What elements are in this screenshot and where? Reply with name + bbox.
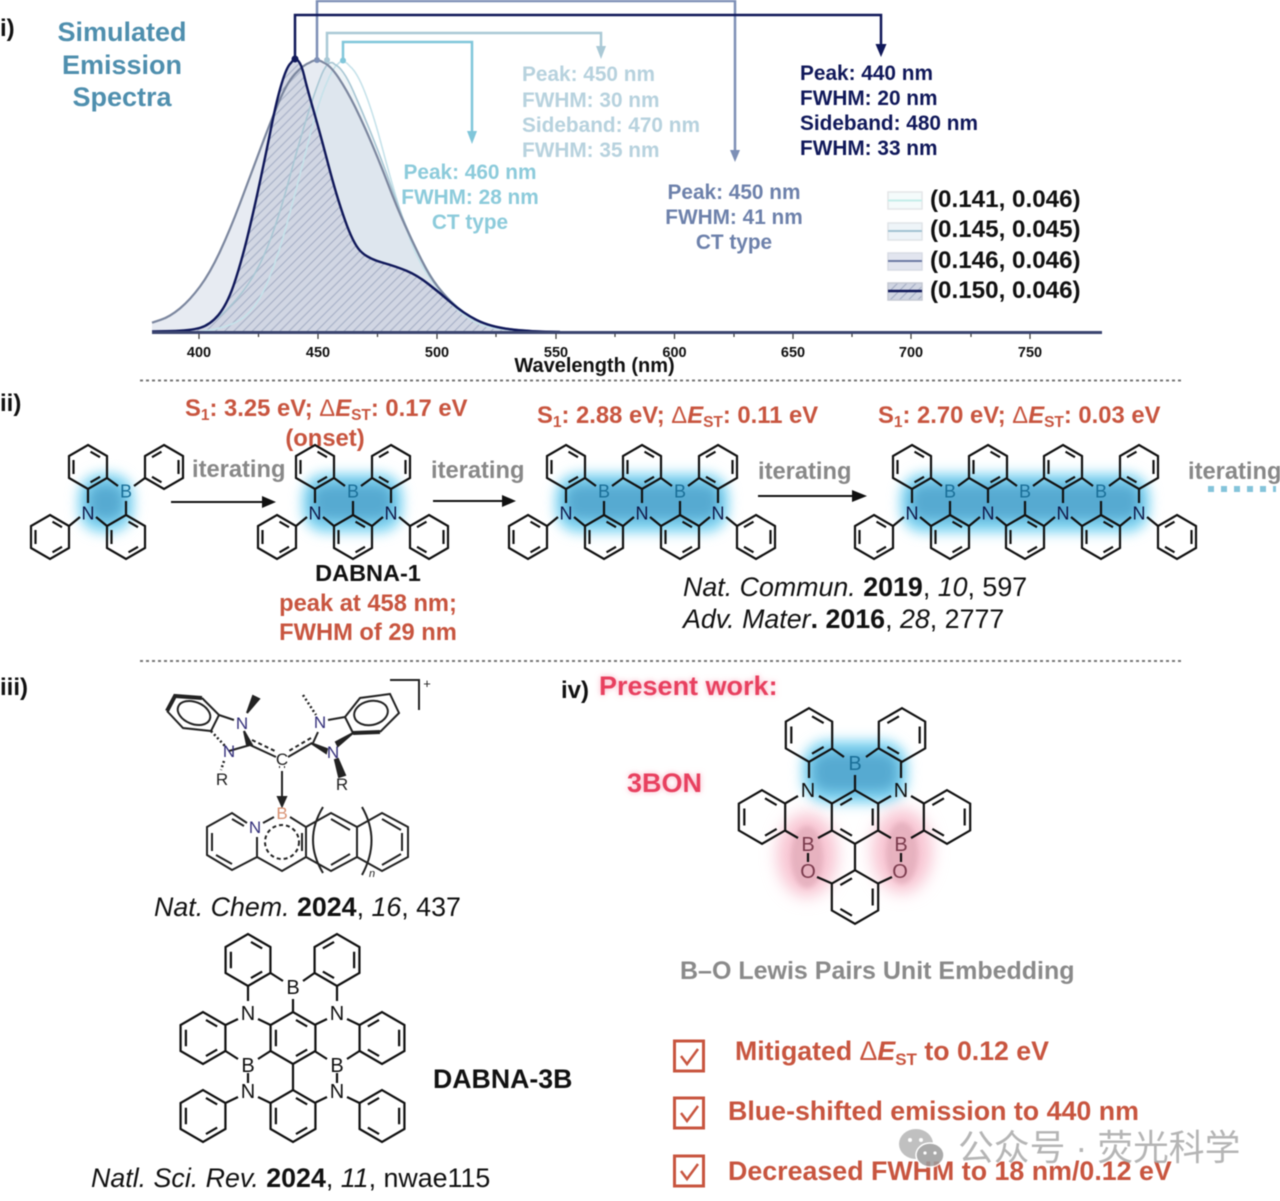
heading: S1 2.88 eV: ST xyxy=(703,414,723,431)
molecule: carbone-stabilised boron: C xyxy=(276,750,288,769)
molecule: three-boron oligomer xyxy=(855,445,1196,559)
molecule: monomer unit xyxy=(31,445,183,559)
heading: S1 2.70 eV: : 2.70 eV; xyxy=(902,402,1012,429)
molecule: three-boron oligomer: N xyxy=(982,504,994,524)
molecule: DABNA-3B xyxy=(181,934,404,1142)
heading: S1 3.25 eV: : 3.25 eV; xyxy=(210,395,319,422)
molecule: carbone-stabilised boron xyxy=(167,676,431,880)
molecule: three-boron oligomer: N xyxy=(906,504,918,524)
glow: right B–O pair xyxy=(872,809,932,893)
check item: FWHM: Decreased FWHM to 18 nm/0.12 eV xyxy=(728,1156,1172,1186)
x axis: 500 xyxy=(425,345,449,361)
axis title: Wavelength (nm) xyxy=(514,355,675,377)
molecule: three-boron oligomer: B xyxy=(1019,482,1031,502)
panel label: i: i) xyxy=(0,15,15,42)
molecule: 3BON: O xyxy=(892,861,908,883)
legend: (0.150, 0.046) xyxy=(930,277,1081,304)
arrow: 460 nm bracket xyxy=(340,42,477,144)
molecule: carbone-stabilised boron: + xyxy=(423,676,431,691)
label: iterating continuation: iterating xyxy=(1188,459,1280,485)
heading: S1 2.70 eV: : 0.03 eV xyxy=(1064,402,1161,429)
heading: Present work: Present work: xyxy=(599,671,778,701)
glow: blue B–N core xyxy=(802,740,908,804)
x axis: 700 xyxy=(899,345,923,361)
references: panel ii: Nat. Commun. 2019, 10, 597 xyxy=(683,572,1027,602)
molecule: carbone-stabilised boron: N xyxy=(249,818,261,837)
x axis: 550 xyxy=(544,345,568,361)
checklist xyxy=(674,1036,1172,1186)
heading: S1 3.25 eV: ΔE xyxy=(319,395,351,422)
arrow: iterating 3 xyxy=(758,459,867,502)
x axis: 450 xyxy=(306,345,330,361)
check item: mitigated: Mitigated ΔE xyxy=(735,1036,895,1066)
heading: S1 3.25 eV: S xyxy=(185,395,201,422)
molecule: 3BON: O xyxy=(800,861,816,883)
legend: (0.141, 0.046) xyxy=(930,186,1081,213)
molecule: two-boron oligomer: N xyxy=(636,504,648,524)
molecule: two-boron oligomer: B xyxy=(598,482,610,502)
title: Simulated Emission Spectra: Simulated xyxy=(57,17,187,47)
heading: S1 2.70 eV: 1 xyxy=(894,414,903,431)
heading: S1 2.88 eV: S xyxy=(537,402,553,429)
annotation: 450 nm sideband: FWHM: 35 nm xyxy=(522,139,660,162)
left benzo ring xyxy=(167,696,219,731)
check item: mitigated: to 0.12 eV xyxy=(917,1036,1049,1066)
molecule: 3BON xyxy=(739,708,970,924)
molecule: DABNA-1 xyxy=(258,445,448,559)
area fill: wide spectrum xyxy=(152,60,560,332)
check item: mitigated xyxy=(674,1036,1049,1071)
watermark: 公众号 · 荧光科学 xyxy=(958,1128,1240,1168)
molecule: carbone-stabilised boron: R xyxy=(336,775,348,794)
curve: 450 nm sideband xyxy=(170,63,560,332)
arrow: iterating 2: iterating xyxy=(431,458,524,484)
molecule: 3BON: B xyxy=(801,834,815,856)
references: panel ii xyxy=(681,572,1027,634)
annotation: 440 nm: FWHM: 33 nm xyxy=(800,137,938,160)
molecule: carbone-stabilised boron: n xyxy=(369,868,375,880)
molecule: carbone-stabilised boron: N xyxy=(223,742,235,761)
heading: S1 2.88 eV: 1 xyxy=(553,414,562,431)
title: Simulated Emission Spectra: Spectra xyxy=(72,82,173,112)
heading: S1 2.70 eV: S xyxy=(878,402,894,429)
annotation: 450 nm sideband: Sideband: 470 nm xyxy=(522,114,700,137)
molecule: two-boron oligomer: N xyxy=(712,504,724,524)
text: DABNA-1 emission: FWHM of 29 nm xyxy=(279,620,457,646)
molecule: carbone-stabilised boron: B xyxy=(276,804,288,823)
molecule: two-boron oligomer xyxy=(509,445,775,559)
heading: S1 3.25 eV: 1 xyxy=(201,407,210,424)
reference: Nat. Chem.: Nat. Chem. 2024, 16, 437 xyxy=(154,892,461,922)
x axis: 650 xyxy=(781,345,805,361)
arrow: 450 nm CT bracket xyxy=(314,1,740,162)
molecule: DABNA-3B: B xyxy=(286,977,300,999)
arrow: 440 nm bracket xyxy=(292,15,886,62)
molecule: monomer unit: N xyxy=(82,504,94,524)
molecule: DABNA-3B: N xyxy=(241,1081,255,1103)
annotation: 460 nm CT: Peak: 460 nm xyxy=(404,161,536,184)
arrow: 450 nm sideband bracket xyxy=(324,33,606,63)
molecule: DABNA-3B: B xyxy=(241,1055,255,1077)
legend: (0.146, 0.046) xyxy=(930,247,1081,274)
caption: B–O Lewis pairs: B–O Lewis Pairs Unit Embedding xyxy=(680,957,1075,985)
x axis: 600 xyxy=(662,345,687,361)
molecule: carbone-stabilised boron: N xyxy=(327,743,339,762)
check item: mitigated: ST xyxy=(895,1050,918,1069)
molecule: carbone-stabilised boron: N xyxy=(236,714,248,733)
text: DABNA-1 emission xyxy=(279,591,457,646)
annotation: 450 nm CT: FWHM: 41 nm xyxy=(665,206,803,229)
molecule: carbone-stabilised boron: N xyxy=(314,713,326,732)
molecule: DABNA-3B: N xyxy=(330,1003,344,1025)
annotation: 450 nm CT: Peak: 450 nm xyxy=(668,181,800,204)
molecule: monomer unit: B xyxy=(120,482,132,502)
annotation: 450 nm sideband: FWHM: 30 nm xyxy=(522,89,660,112)
molecule: DABNA-3B: N xyxy=(330,1081,344,1103)
annotation: 440 nm: Sideband: 480 nm xyxy=(800,112,978,135)
molecule: DABNA-1: N xyxy=(308,504,322,524)
molecule: DABNA-1: N xyxy=(384,504,398,524)
annotation: 450 nm sideband: Peak: 450 nm xyxy=(522,63,655,86)
arrow: iterating 1: iterating xyxy=(192,457,285,483)
right benzo ring xyxy=(345,694,399,733)
heading: S1 2.88 eV: : 2.88 eV; xyxy=(562,402,671,429)
legend: (0.145, 0.045) xyxy=(930,216,1081,243)
text: DABNA-1 emission: peak at 458 nm; xyxy=(279,591,457,617)
annotation: 460 nm CT: CT type xyxy=(432,211,508,234)
heading: S1 3.25 eV: ST xyxy=(351,407,371,424)
arrow: iterating 2 xyxy=(431,458,524,507)
molecule: three-boron oligomer: B xyxy=(1095,482,1107,502)
annotation: 450 nm sideband xyxy=(522,63,700,162)
title: Simulated Emission Spectra xyxy=(57,17,187,112)
title: Simulated Emission Spectra: Emission xyxy=(62,50,182,80)
heading: S1 2.70 eV: ΔE xyxy=(1012,402,1044,429)
legend xyxy=(888,186,1081,304)
heading: S1 3.25 eV: : 0.17 eV xyxy=(371,395,468,422)
heading: S1 2.70 eV: ST xyxy=(1044,414,1064,431)
annotation: 440 nm xyxy=(800,62,978,160)
label: DABNA-1: DABNA-1 xyxy=(315,560,421,586)
chart: simulated emission spectra xyxy=(152,59,1102,377)
molecule: DABNA-3B: N xyxy=(241,1003,255,1025)
heading: S1 2.88 eV: : 0.11 eV xyxy=(723,402,818,429)
panel label: iv: iv) xyxy=(561,677,589,704)
annotation: 460 nm CT xyxy=(401,161,539,234)
area fill: sideband spectrum xyxy=(170,63,560,332)
arrow: iterating 3: iterating xyxy=(758,459,851,485)
molecule: DABNA-3B: B xyxy=(330,1055,344,1077)
molecule: 3BON: N xyxy=(801,780,815,802)
molecule: DABNA-1: B xyxy=(347,482,359,502)
molecule: 3BON: B xyxy=(894,834,908,856)
x axis xyxy=(152,332,1102,361)
curve: 450 nm CT type xyxy=(152,60,560,332)
annotation: 460 nm CT: FWHM: 28 nm xyxy=(401,186,539,209)
annotation: 440 nm: Peak: 440 nm xyxy=(800,62,933,85)
annotation: 450 nm CT: CT type xyxy=(696,231,772,254)
curve: 440 nm navy xyxy=(152,59,560,332)
panel label: iii: iii) xyxy=(0,674,28,701)
x axis: 400 xyxy=(187,345,211,361)
annotation: 450 nm CT xyxy=(665,181,803,254)
molecule: two-boron oligomer: B xyxy=(674,482,686,502)
x axis: 750 xyxy=(1018,345,1042,361)
heading: onset: (onset) xyxy=(285,425,365,452)
area fill: hatched navy spectrum xyxy=(152,59,560,332)
molecule: two-boron oligomer: N xyxy=(560,504,572,524)
reference: Natl. Sci. Rev.: Natl. Sci. Rev. 2024, 11, nwae115 xyxy=(91,1163,490,1193)
icon: chat bubbles xyxy=(899,1129,944,1167)
molecule: 3BON: B xyxy=(848,753,862,775)
molecule: three-boron oligomer: B xyxy=(944,482,956,502)
molecule: carbone-stabilised boron: R xyxy=(216,770,228,789)
glow: left B–O pair xyxy=(777,813,837,897)
label: DABNA-3B: DABNA-3B xyxy=(433,1064,572,1094)
molecule: three-boron oligomer: N xyxy=(1056,504,1070,524)
panel label: ii: ii) xyxy=(0,390,21,417)
molecule: 3BON: N xyxy=(894,780,908,802)
arrow: iterating 1 xyxy=(171,457,285,508)
label: 3BON: 3BON xyxy=(627,768,702,798)
annotation: 440 nm: FWHM: 20 nm xyxy=(800,87,938,110)
molecule: three-boron oligomer: N xyxy=(1132,504,1146,524)
heading: S1 2.88 eV: ΔE xyxy=(671,402,703,429)
check item: blue-shifted: Blue-shifted emission to 440 nm xyxy=(728,1096,1139,1126)
references: panel ii: Adv. Mater. 2016, 28, 2777 xyxy=(681,604,1004,634)
curve: 460 nm CT type xyxy=(200,61,560,332)
